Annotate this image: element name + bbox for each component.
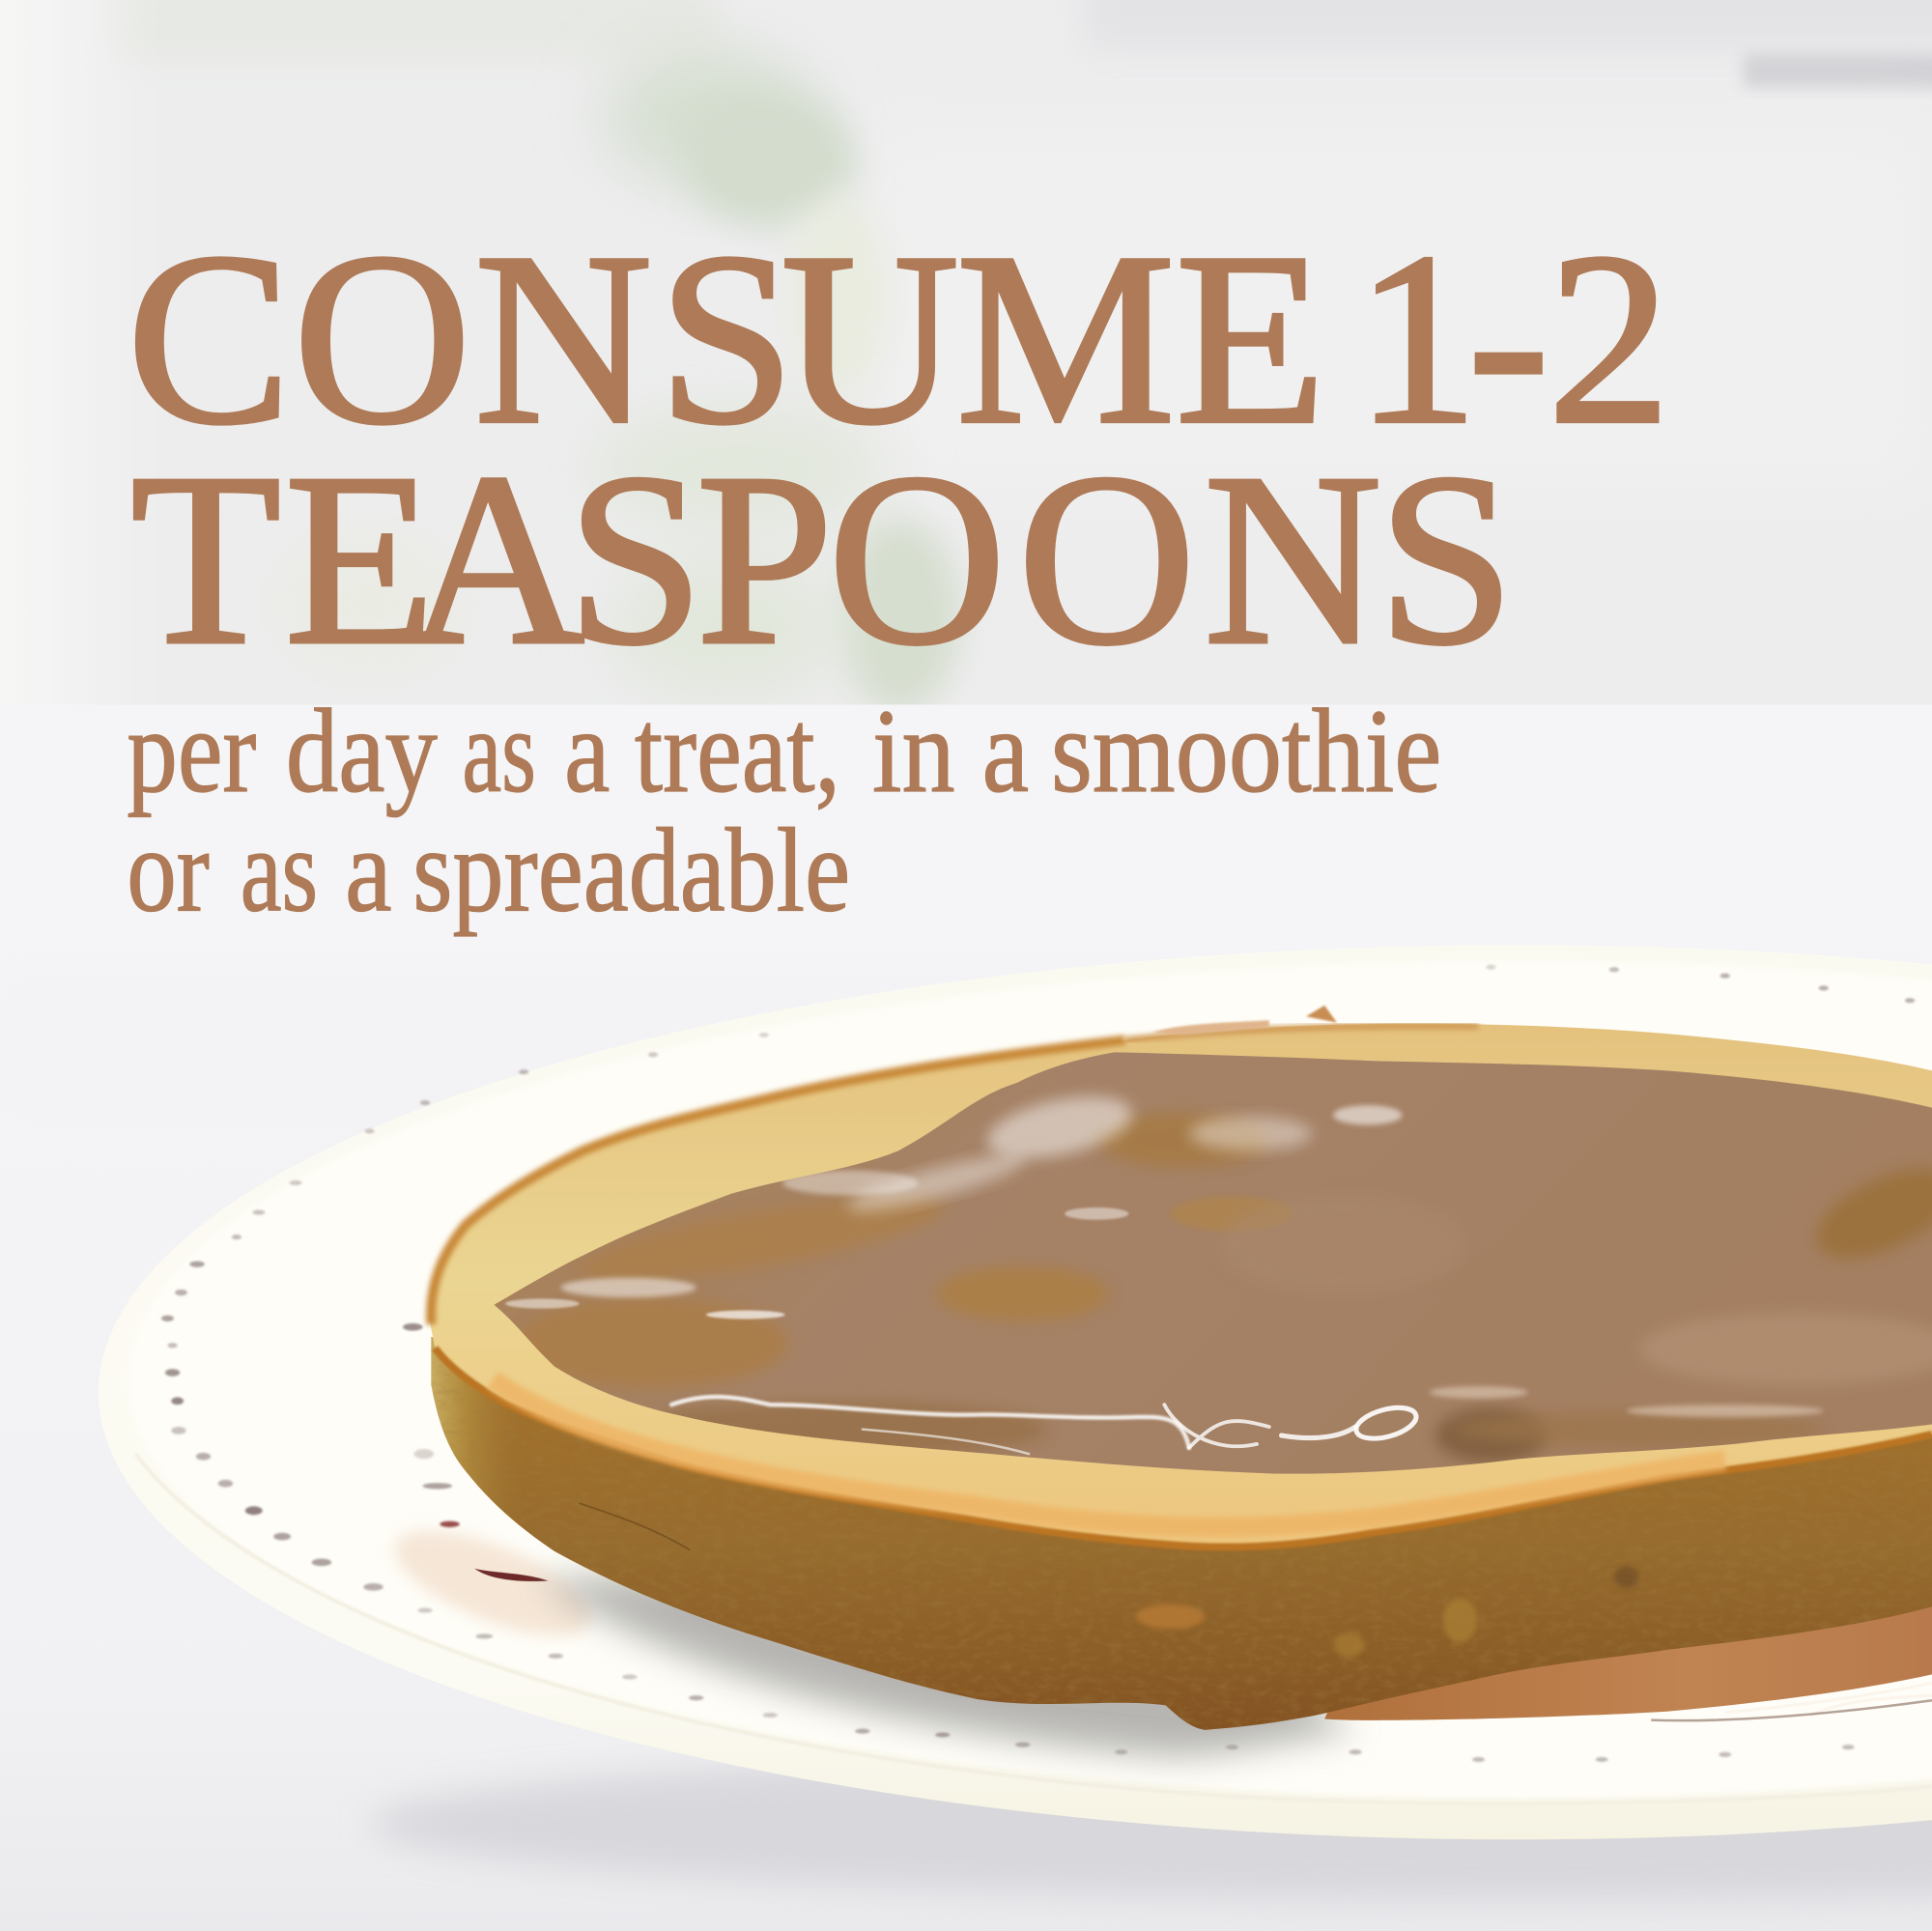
nut butter spread <box>469 1035 1932 1491</box>
toast top crumb <box>429 1024 1932 1547</box>
toast shadow on plate <box>542 1577 1355 1756</box>
toast <box>429 1006 1932 1730</box>
toast crust side <box>431 1337 1932 1730</box>
title <box>127 203 1671 696</box>
title: TEASPOONS <box>130 424 1515 696</box>
subtitle: treat, <box>635 685 840 817</box>
glossy highlights <box>505 1086 1403 1319</box>
subtitle: a <box>982 685 1029 817</box>
toast chip at plate <box>1306 1006 1337 1023</box>
title: CONSUME 1-2 <box>127 203 1671 475</box>
subtitle: a <box>564 685 610 817</box>
subtitle: as <box>462 685 536 817</box>
subtitle: spreadable <box>412 805 850 937</box>
subtitle: in <box>872 685 955 817</box>
subtitle: per <box>127 685 256 817</box>
subtitle <box>127 685 1441 937</box>
subtitle: smoothie <box>1051 685 1441 817</box>
plate stain: peach smear <box>382 1510 604 1657</box>
subtitle: day <box>286 685 438 817</box>
plate mark: dark red chip <box>474 1569 549 1581</box>
plate rim dots <box>161 965 1915 1762</box>
subtitle: a <box>345 805 392 937</box>
subtitle: or <box>127 805 210 937</box>
plate shadow on table <box>370 1747 1932 1900</box>
plate <box>99 945 1932 1839</box>
spread puddle on plate <box>1324 1589 1932 1720</box>
subtitle: as <box>241 805 318 937</box>
